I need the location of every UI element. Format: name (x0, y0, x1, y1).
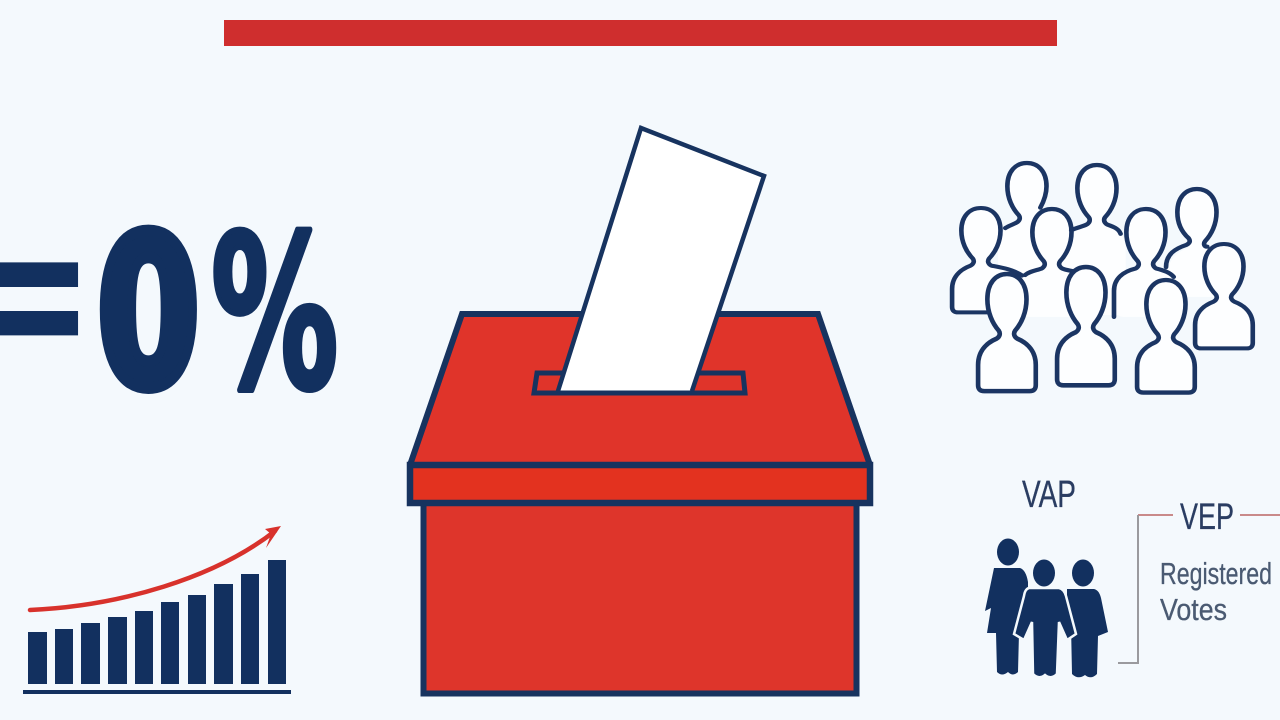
VEP label: VEP (1180, 496, 1234, 537)
back person 2 (1071, 165, 1121, 234)
front person 2 (1057, 267, 1115, 385)
VAP label: VAP (1022, 474, 1076, 516)
right person (1195, 244, 1253, 348)
Registered Voters label (1160, 556, 1272, 627)
box lid top (410, 314, 870, 465)
title bar (224, 20, 1057, 46)
big statistic: =0%: % (211, 192, 338, 438)
box body (424, 503, 856, 694)
back person 3 (1166, 189, 1216, 267)
bracket connector (1118, 515, 1280, 663)
middle person left (952, 208, 1022, 312)
icon: crowd of people outlines (952, 163, 1253, 393)
left person (985, 538, 1028, 674)
baseline (23, 690, 291, 694)
icon: three people silhouettes (985, 538, 1108, 677)
white body fills behind the crowd (998, 163, 1226, 317)
ballot slot (534, 373, 745, 393)
right person (1067, 560, 1108, 677)
middle person right (1114, 209, 1174, 317)
big statistic: =0% (0, 192, 338, 438)
bars (28, 560, 286, 684)
middle person centre (1025, 209, 1074, 275)
trend arrow (30, 526, 281, 610)
bar chart with rising trend (23, 526, 291, 694)
front person 3 (1137, 280, 1195, 393)
ballot box (410, 128, 870, 694)
back person 1 (1005, 163, 1046, 228)
big statistic: =0%: 0 (97, 192, 200, 435)
front person 1 (978, 274, 1036, 391)
middle person (1014, 560, 1076, 677)
box lid band (410, 465, 870, 503)
ballot paper (534, 128, 764, 393)
Registered Voters label: Votes (1160, 592, 1227, 627)
